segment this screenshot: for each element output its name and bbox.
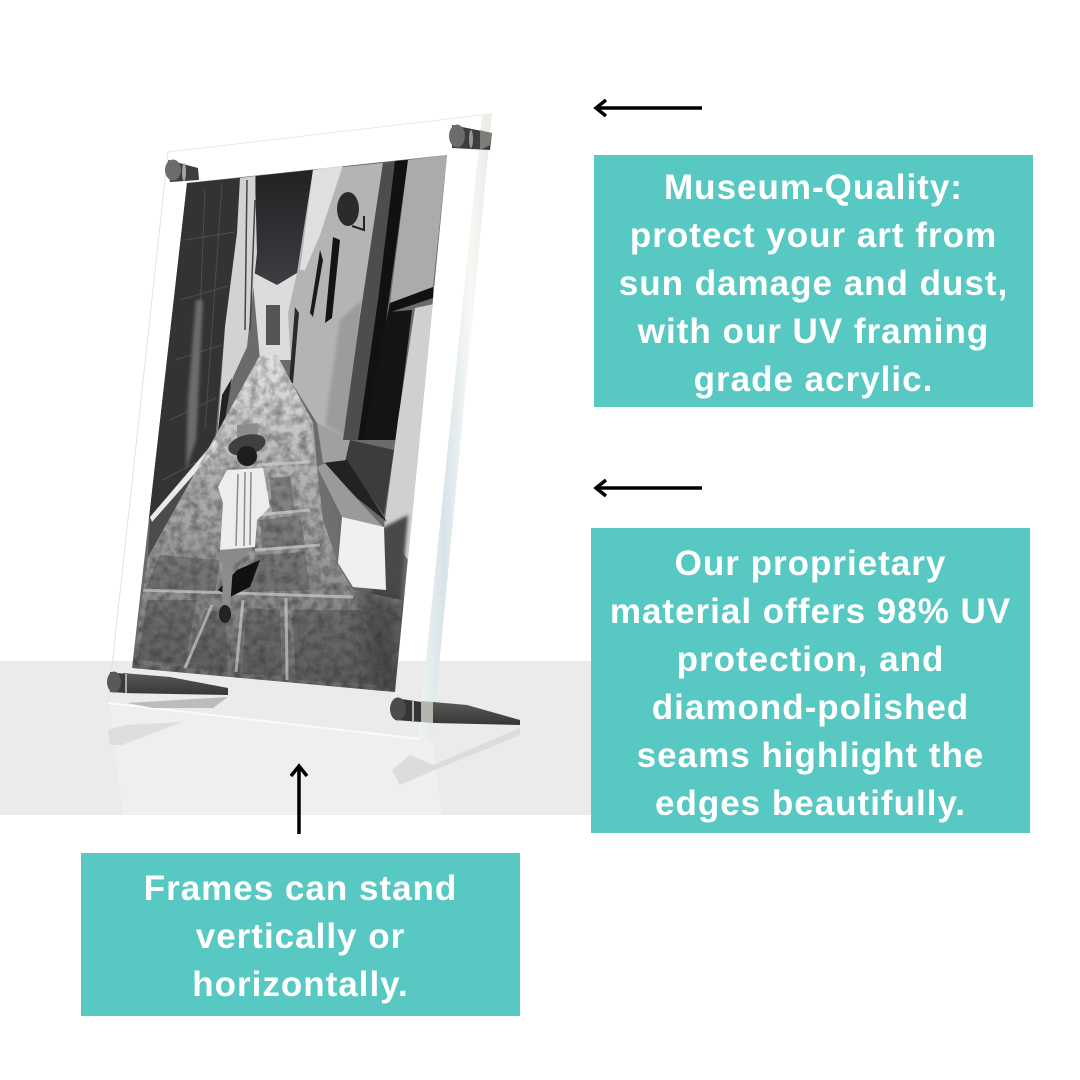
product: acrylic frame with photo [107,113,520,785]
callout: proprietary material: protection, and [677,640,944,679]
standoff: top right [449,124,492,150]
door [372,310,412,440]
callout: museum quality: Museum-Quality: [664,168,963,207]
callout: proprietary material: material offers 98% UV [610,592,1011,631]
callout: museum quality [594,155,1033,407]
standoff: top left [165,160,199,182]
street [132,355,402,692]
callout: proprietary material: diamond-polished [652,688,969,727]
far buildings [252,272,297,360]
callout: proprietary material: edges beautifully. [655,784,966,823]
dark bottom right shade [355,590,405,695]
callout: stand vertically or horizontally [81,853,520,1016]
reflection of frame and feet [108,705,520,815]
callout: stand vertically or horizontally: horizontally. [192,965,409,1004]
plaster panel [390,155,447,303]
door stairs [345,440,394,515]
windows [310,250,323,317]
callout: museum quality: sun damage and dust, [619,264,1008,303]
left wall [148,178,240,520]
foot: left spike reflection [127,697,228,708]
pillar [384,304,434,560]
callout: museum quality: with our UV framing [638,312,989,351]
child [218,423,270,623]
callout: stand vertically or horizontally: vertically or [196,917,405,956]
grey shelf band [0,661,592,815]
stone texture [130,350,405,695]
kerb [323,460,387,522]
foot: left spike [107,672,228,695]
photo: child in alley [120,150,460,700]
callout: museum quality: protect your art from [630,216,997,255]
sky [253,170,313,285]
foot: right spike [390,698,520,725]
frame acrylic [108,113,492,740]
callout: proprietary material [591,528,1030,833]
callout: proprietary material: seams highlight the [637,736,984,775]
callout: stand vertically or horizontally: Frames can stand [144,869,457,908]
lit inner wall [217,176,257,440]
callout: proprietary material: Our proprietary [675,544,946,583]
right wall [288,163,383,440]
callout: museum quality: grade acrylic. [694,360,933,399]
lantern [337,192,359,226]
